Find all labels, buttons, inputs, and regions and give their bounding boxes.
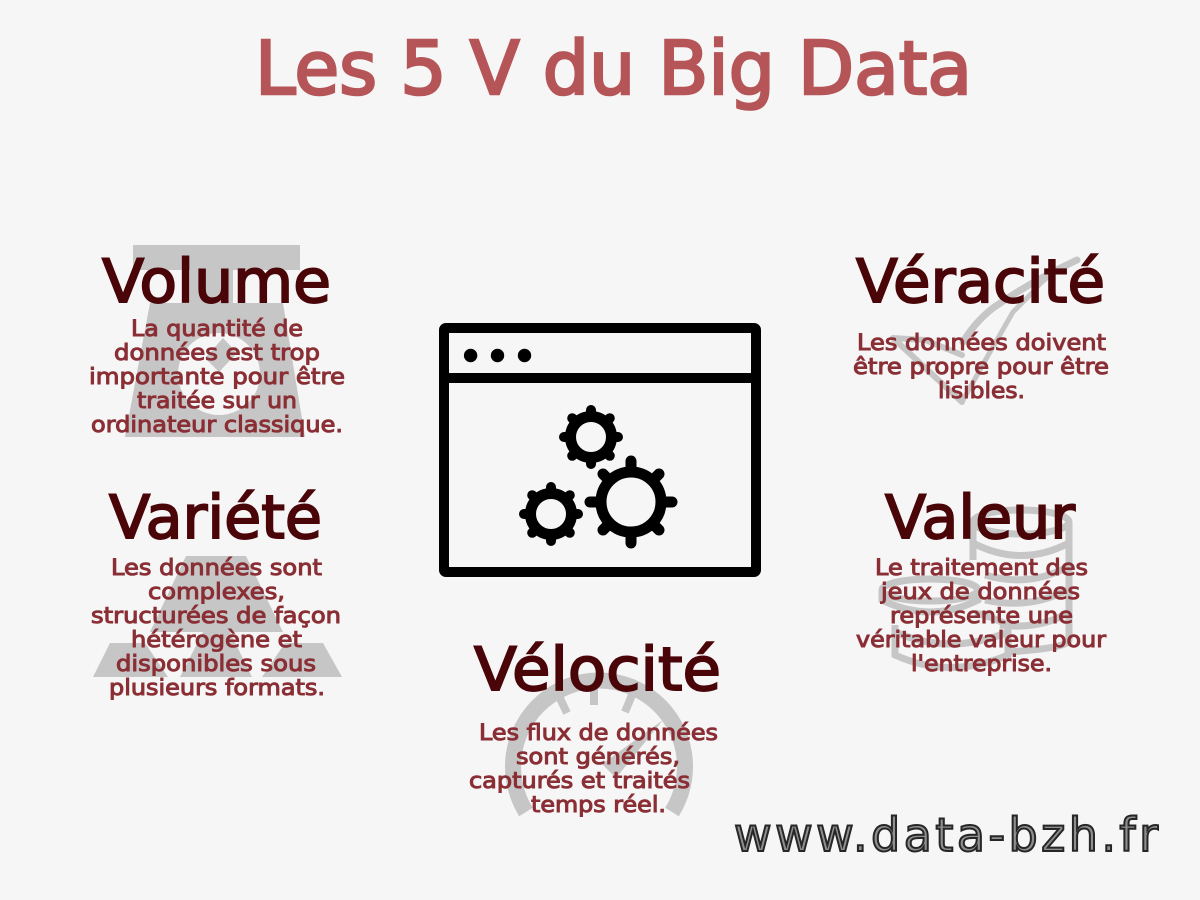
- heading: Valeur: Valeur: [885, 483, 1075, 553]
- text block: Valeur description: [856, 556, 1107, 677]
- title: Les 5 V du Big Data: [255, 26, 972, 112]
- text block: Vélocité description: sont générés,: [516, 745, 680, 770]
- icon: three stacked blocks: [93, 556, 342, 677]
- text block: Volume description: La quantité de: [131, 317, 303, 342]
- text block: Volume description: données est trop: [114, 341, 320, 366]
- panel: Variété: [91, 483, 342, 701]
- text block: Véracité description: Les données doivent: [857, 331, 1106, 356]
- text block: Variété description: structurées de façon: [91, 604, 341, 629]
- text block: Véracité description: lisibles.: [938, 379, 1025, 404]
- text block: Volume description: ordinateur classique.: [91, 413, 343, 438]
- icon: browser window with gears: [444, 328, 756, 572]
- text block: Valeur description: représente une: [890, 604, 1073, 629]
- text block: Valeur description: Le traitement des: [875, 556, 1088, 581]
- text block: Valeur description: véritable valeur pour: [856, 628, 1107, 653]
- icon: weight scale: [125, 245, 305, 437]
- text block: Valeur description: jeux de données: [880, 580, 1080, 605]
- text block: Volume description: importante pour être: [89, 365, 345, 390]
- panel: Véracité: [853, 247, 1109, 404]
- text block: Variété description: hétérogène et: [131, 628, 302, 653]
- heading: Véracité: Véracité: [856, 247, 1105, 317]
- icon: check mark: [893, 260, 1077, 402]
- text block: Volume description: [89, 317, 345, 438]
- text block: Vélocité description: Les flux de données: [479, 721, 718, 746]
- panel: Vélocité: [469, 635, 721, 818]
- heading: Vélocité: Vélocité: [474, 635, 721, 705]
- panel: Valeur: [856, 483, 1107, 677]
- text block: Vélocité description: capturés et traités: [469, 769, 690, 794]
- icon: speedometer: [513, 681, 685, 812]
- heading: Variété: Variété: [109, 483, 322, 553]
- text block: Variété description: Les données sont: [111, 556, 322, 581]
- text block: Variété description: disponibles sous: [116, 652, 316, 677]
- panel: Volume: [89, 245, 345, 438]
- text block: Valeur description: l'entreprise.: [911, 652, 1052, 677]
- text block: Variété description: [91, 556, 341, 701]
- text block: Volume description: traitée sur un: [137, 389, 297, 414]
- icon: coin stacks: [882, 510, 1069, 668]
- text block: Véracité description: être propre pour être: [853, 355, 1109, 380]
- text block: Variété description: plusieurs formats.: [109, 676, 325, 701]
- website url: www.data-bzh.fr: [734, 808, 1158, 862]
- text block: Vélocité description: [469, 721, 718, 818]
- text block: Vélocité description: temps réel.: [531, 793, 666, 818]
- text block: Véracité description: [853, 331, 1109, 404]
- heading: Volume: Volume: [102, 247, 331, 317]
- text block: Variété description: complexes,: [148, 580, 285, 605]
